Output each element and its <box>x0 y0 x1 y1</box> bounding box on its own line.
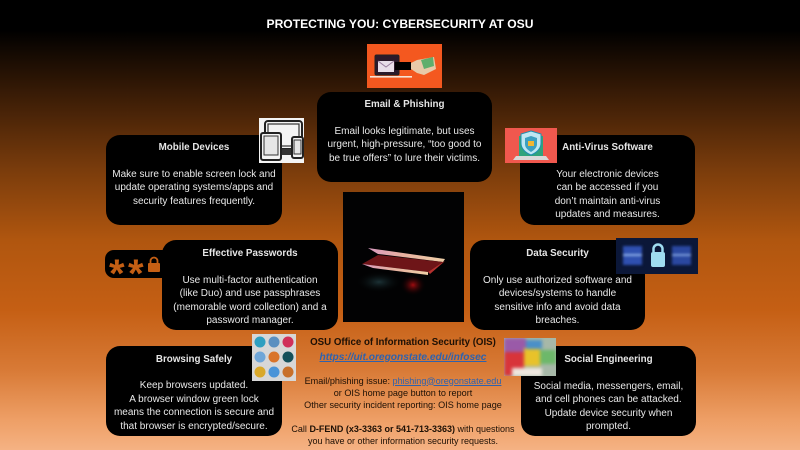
panel: mobile devices <box>106 135 282 225</box>
icon: mobile devices <box>259 118 304 163</box>
text: mobile devices body: Make sure to enable screen lock and <box>112 169 276 180</box>
text: effective passwords body: password manager. <box>206 315 294 326</box>
text: anti-virus body <box>555 169 660 220</box>
heading: email and phishing: Email & Phishing <box>364 99 445 110</box>
text: browsing safely body: Keep browsers updated. <box>140 380 248 391</box>
text: reporting instructions <box>304 376 502 410</box>
text: email and phishing body: be true offers” to lure their victims. <box>329 153 480 164</box>
text: email and phishing body: Email looks legitimate, but uses <box>334 126 475 137</box>
text: anti-virus body: updates and measures. <box>555 209 660 220</box>
text: email and phishing body <box>328 126 481 164</box>
text: effective passwords body: (like Duo) and use passphrases <box>180 288 320 299</box>
text: mobile devices body <box>112 169 276 207</box>
text: mobile devices body: security features frequently. <box>133 196 255 207</box>
panel: browsing safely <box>106 346 282 436</box>
text: effective passwords body <box>173 275 327 326</box>
text: anti-virus body: Your electronic devices <box>556 169 659 180</box>
heading: data security: Data Security <box>526 248 589 259</box>
contact block: OSU Office of Information Security <box>291 337 515 446</box>
text: effective passwords body: (memorable word collection) and a <box>173 302 327 313</box>
heading: browsing safely: Browsing Safely <box>156 354 232 364</box>
icon: email phishing laptop <box>367 44 442 88</box>
text: effective passwords body: Use multi-factor authentication <box>182 275 318 286</box>
text: browsing safely body <box>114 380 274 432</box>
text: reporting instructions: Email/phishing issue: phishing@oregonstate.edu <box>305 376 501 386</box>
text: email and phishing body: urgent, high-pressure, “too good to <box>328 139 481 150</box>
panel: central laptop photo <box>343 192 464 322</box>
title: PROTECTING YOU: CYBERSECURITY AT OSU <box>266 17 533 31</box>
text: D-FEND phone contact: you have or other information security requests. <box>308 436 498 446</box>
text: browsing safely body: means the connection is secure and <box>114 407 274 418</box>
text: browsing safely body: that browser is encrypted/secure. <box>120 421 268 432</box>
link: OIS website: https://uit.oregonstate.edu/infosec <box>320 352 486 363</box>
icon: data security padlocks <box>616 238 698 274</box>
text: data security body: devices/systems to handle <box>499 288 616 299</box>
heading: OIS office name: OSU Office of Information Security (OIS) <box>310 337 496 348</box>
icon: password asterisks and lock pill <box>105 250 175 278</box>
text: anti-virus body: can be accessed if you <box>557 182 658 193</box>
panel: email and phishing <box>317 92 492 182</box>
text: reporting instructions: or OIS home page button to report <box>334 388 472 398</box>
text: D-FEND phone contact <box>291 424 515 446</box>
text: D-FEND phone contact: Call D-FEND (x3-3363 or 541-713-3363) with questions <box>291 424 515 434</box>
panel: data security <box>470 240 645 330</box>
text: social engineering body: Social media, messengers, email, <box>534 381 683 392</box>
text: data security body <box>483 275 632 326</box>
text: browsing safely body: A browser window green lock <box>129 394 259 405</box>
text: data security body: sensitive info and avoid data <box>494 302 621 313</box>
text: anti-virus body: don’t maintain anti-virus <box>555 196 660 207</box>
text: social engineering body: Update device security when <box>545 408 672 419</box>
panel: social engineering <box>521 346 696 436</box>
text: reporting instructions: Other security incident reporting: OIS home page <box>304 400 502 410</box>
heading: mobile devices: Mobile Devices <box>159 142 229 153</box>
panel: effective passwords <box>162 240 338 330</box>
text: social engineering body: and cell phones can be attacked. <box>535 394 682 405</box>
icon: browser logos grid <box>252 334 296 381</box>
heading: social engineering: Social Engineering <box>564 354 653 365</box>
text: social engineering body <box>534 381 683 432</box>
heading: effective passwords: Effective Passwords <box>202 248 298 259</box>
text: data security body: breaches. <box>536 315 579 326</box>
icon: social media collage <box>504 338 556 376</box>
text: data security body: Only use authorized software and <box>483 275 632 286</box>
text: mobile devices body: update operating systems/apps and <box>115 182 273 193</box>
heading: anti-virus software: Anti-Virus Software <box>562 142 653 153</box>
text: social engineering body: prompted. <box>586 421 631 432</box>
panel: anti-virus software <box>520 135 695 225</box>
icon: anti-virus shield on laptop <box>505 128 557 163</box>
